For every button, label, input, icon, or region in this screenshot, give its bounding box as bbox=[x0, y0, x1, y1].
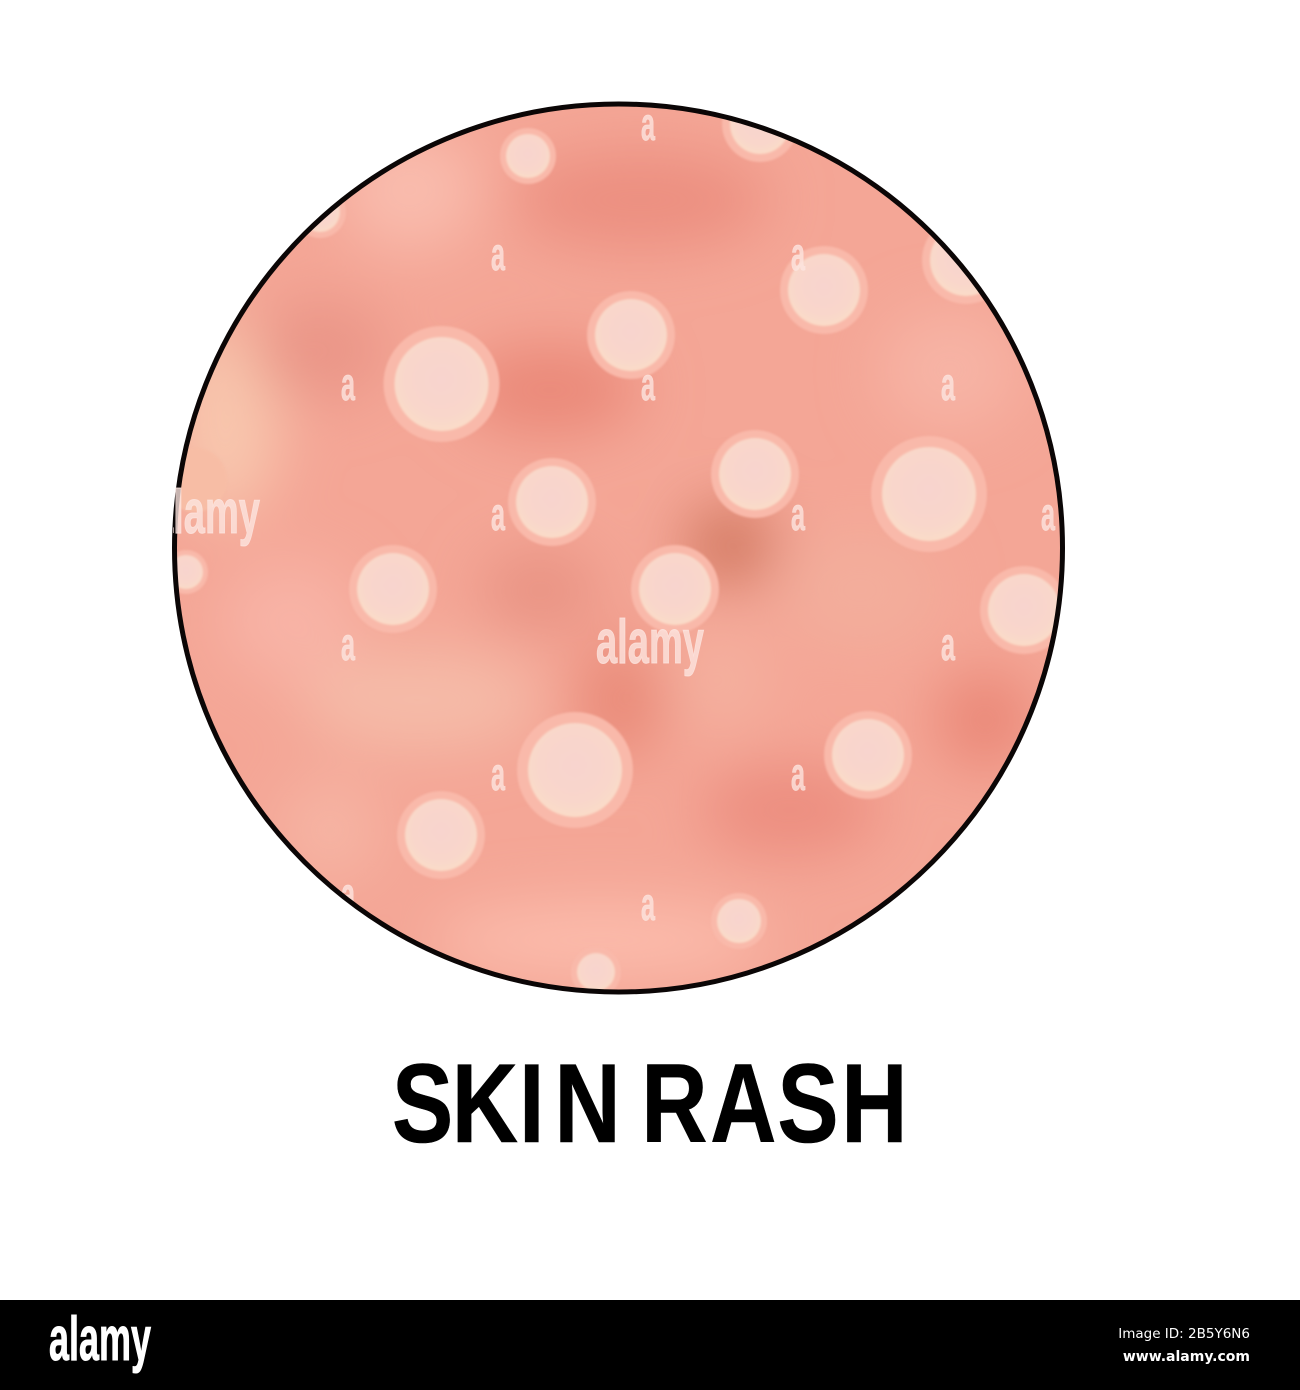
watermarks: a bbox=[491, 748, 505, 800]
watermarks: a bbox=[941, 618, 955, 670]
watermark: alamy centre: alamy bbox=[596, 608, 704, 677]
watermarks: a bbox=[641, 878, 655, 930]
watermark: alamy left: alamy bbox=[152, 478, 260, 547]
watermarks: a bbox=[641, 358, 655, 410]
circle outline bbox=[174, 104, 1062, 992]
footer logo: alamy bbox=[49, 1305, 151, 1374]
watermarks: a bbox=[341, 358, 355, 410]
watermarks bbox=[341, 98, 1055, 930]
skin rash circle bbox=[152, 86, 1070, 1000]
pustules bbox=[163, 86, 1068, 997]
title: SKIN RASH bbox=[392, 1040, 908, 1166]
watermarks: a bbox=[341, 868, 355, 920]
watermarks: a bbox=[1041, 488, 1055, 540]
skin background bbox=[170, 100, 1070, 1000]
watermarks: a bbox=[791, 488, 805, 540]
image id text: Image ID: 2B5Y6N6 bbox=[1118, 1326, 1250, 1342]
watermarks: a bbox=[491, 488, 505, 540]
watermarks: a bbox=[491, 228, 505, 280]
website text: www.alamy.com bbox=[1123, 1349, 1250, 1365]
footer bar bbox=[0, 1300, 1300, 1390]
watermarks: a bbox=[341, 618, 355, 670]
watermarks: a bbox=[941, 358, 955, 410]
watermarks: a bbox=[791, 748, 805, 800]
watermarks: a bbox=[641, 98, 655, 150]
watermarks: a bbox=[791, 228, 805, 280]
